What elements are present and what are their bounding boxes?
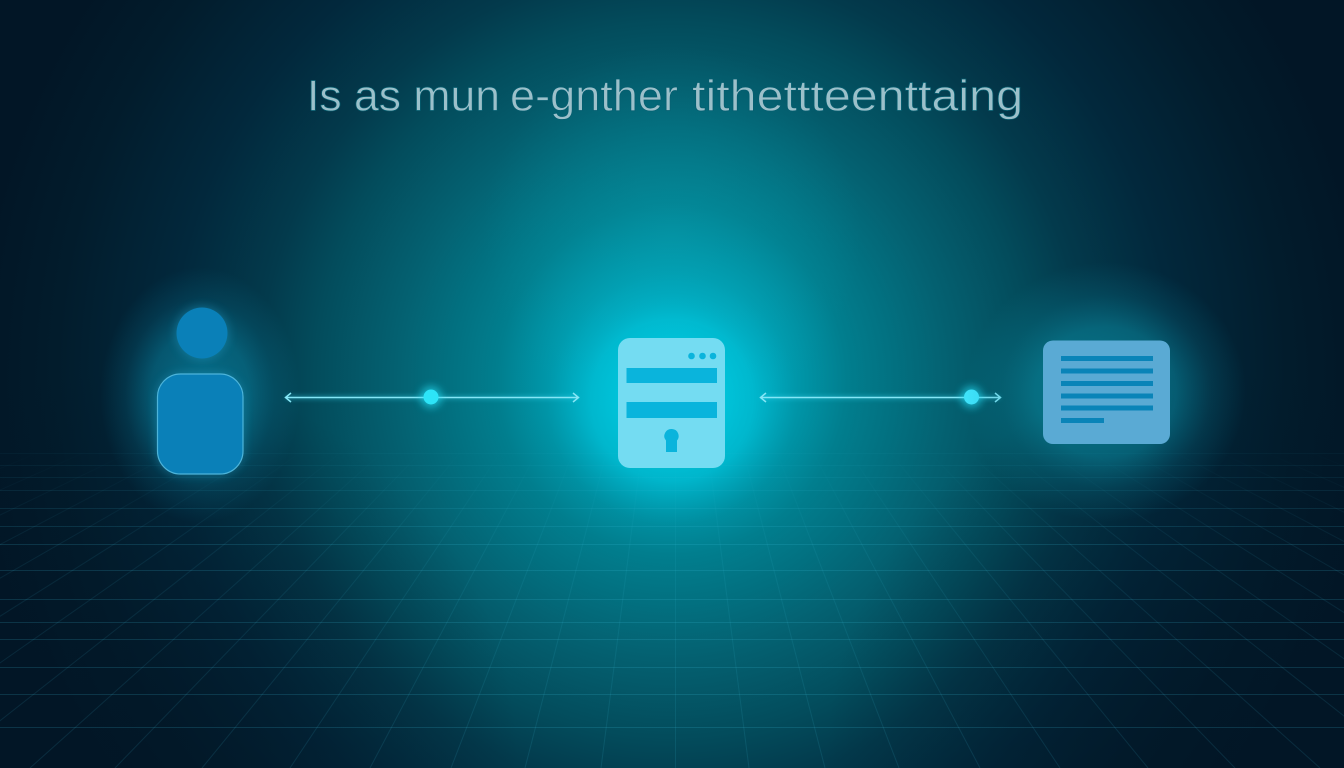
server indicator dots [688, 353, 716, 359]
icon: secure server [618, 338, 725, 468]
arrow: person to server [286, 386, 578, 408]
title: tithettteenttaing [692, 72, 1023, 120]
document text lines [1061, 356, 1153, 423]
icon: person [100, 267, 300, 523]
title [307, 72, 1023, 120]
keyhole [664, 429, 679, 452]
icon: document [966, 262, 1246, 522]
title: e-gnther [510, 72, 678, 120]
perspective floor grid [0, 450, 1344, 768]
server slot bars [626, 368, 717, 418]
title: Is as mun [307, 72, 500, 120]
arrow: server to document [760, 386, 1000, 408]
